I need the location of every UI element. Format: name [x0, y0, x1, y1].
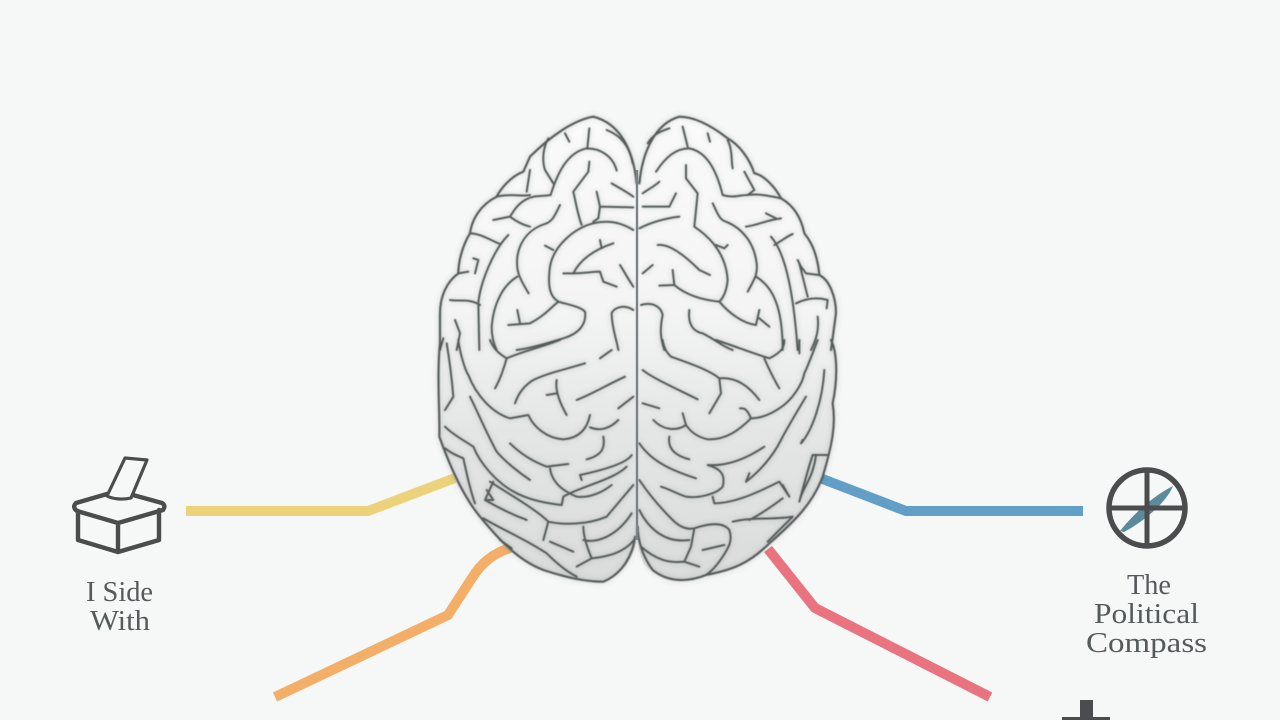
connector: orange line: [275, 548, 510, 697]
label: I Side With: With: [90, 606, 150, 637]
label: I Side With: I Side: [86, 577, 153, 608]
ballot paper: [107, 458, 147, 499]
compass ring and cross: [1110, 470, 1184, 546]
connector: blue line: [820, 478, 1083, 511]
label: The Political Compass: [1086, 569, 1207, 659]
brain folds: [438, 117, 836, 582]
brain silhouette: [439, 117, 837, 582]
icon: cropped chart bars: [1062, 700, 1110, 720]
compass needle: [1120, 486, 1173, 532]
label: The Political Compass: Compass: [1086, 627, 1207, 659]
right lower sulci: [638, 340, 836, 580]
right upper sulci: [639, 117, 836, 350]
label: The Political Compass: The: [1127, 569, 1171, 601]
icon: ballot box: [74, 458, 164, 552]
connector: red line: [768, 549, 990, 697]
label: The Political Compass: Political: [1094, 598, 1199, 630]
label: I Side With: [86, 577, 153, 637]
icon: compass: [1109, 470, 1185, 546]
connector: yellow line: [186, 478, 455, 511]
brain midline: [636, 170, 638, 540]
left upper sulci: [440, 117, 637, 350]
brain illustration: [438, 117, 837, 582]
box: [74, 494, 164, 552]
left lower sulci: [438, 340, 635, 582]
